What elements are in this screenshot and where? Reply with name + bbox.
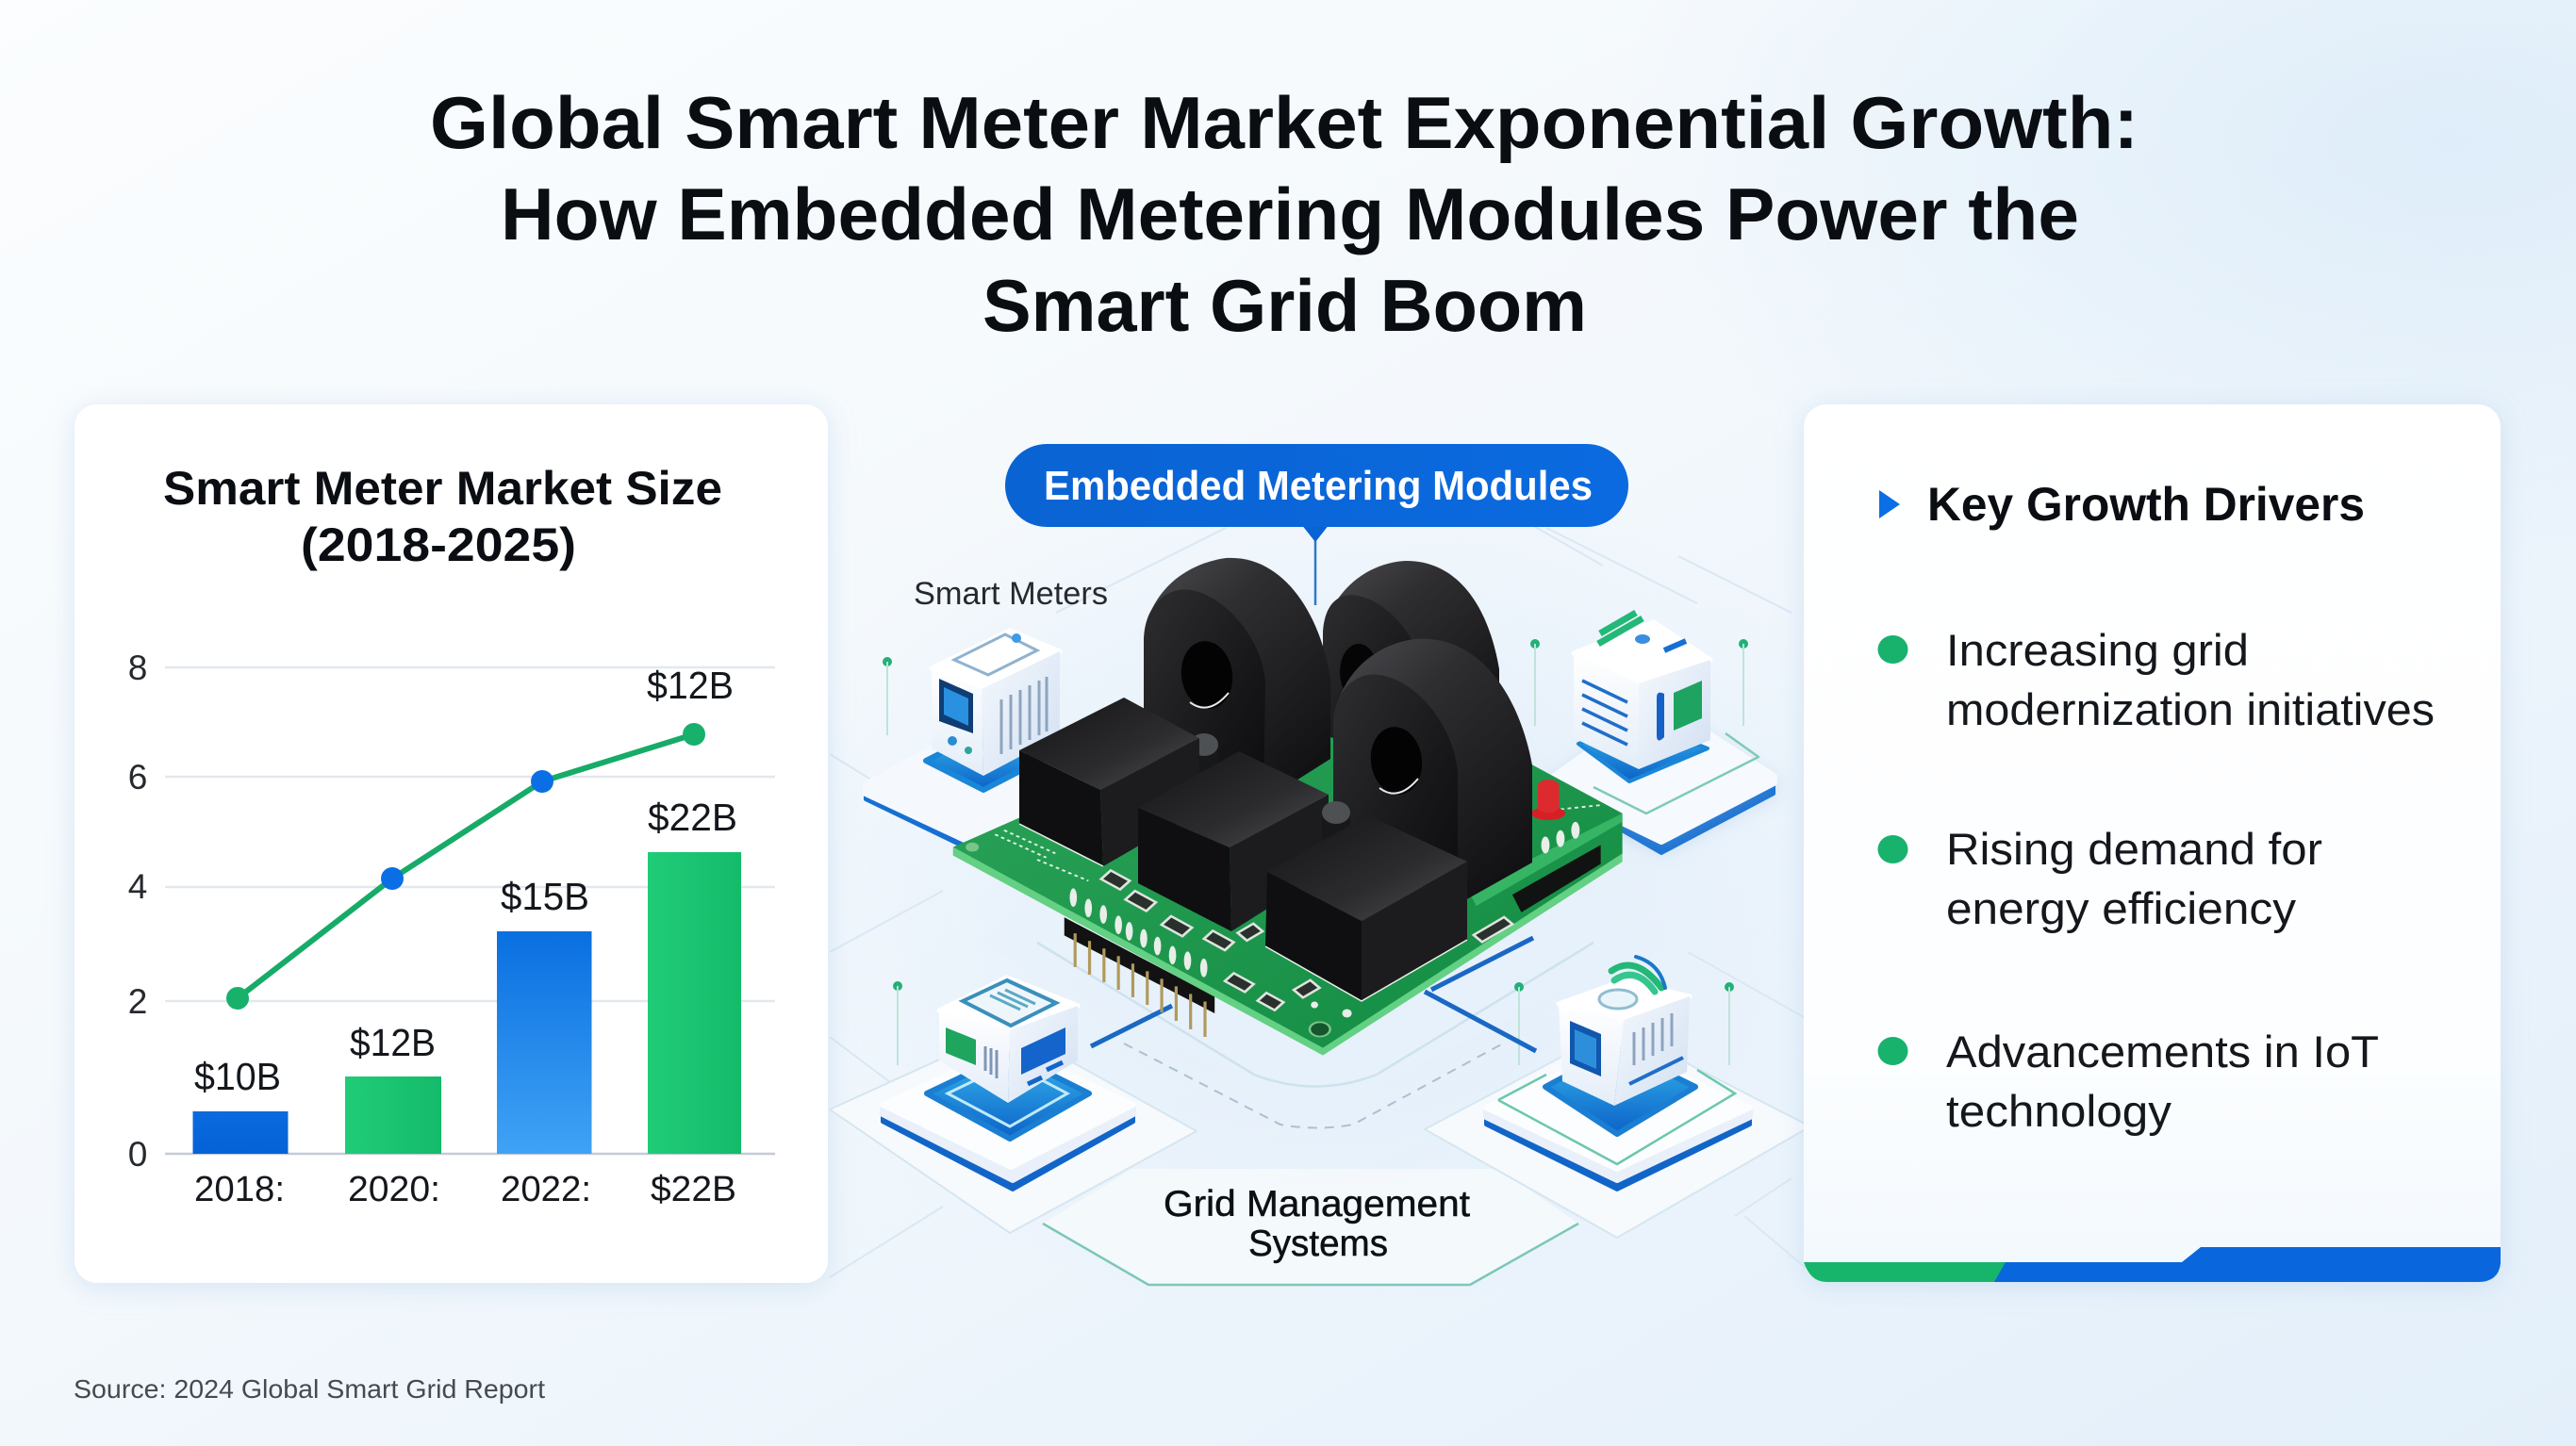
platform bbox=[1617, 777, 1774, 853]
board edge bbox=[953, 847, 1623, 1056]
bars bbox=[192, 852, 741, 1154]
relay cube: front bbox=[1265, 815, 1467, 1001]
chart heading: (2018-2025) bbox=[301, 518, 576, 571]
upper daughter board bbox=[1468, 813, 1623, 906]
mounting holes bbox=[966, 843, 979, 852]
module: smart meter top left bbox=[866, 631, 1060, 850]
capacitor: front bbox=[1322, 801, 1350, 841]
bottom accent band bbox=[1804, 1247, 2501, 1282]
title: Smart Grid Boom bbox=[983, 264, 1587, 347]
transformer: back left bbox=[1144, 558, 1330, 801]
driver: iot technology: technology bbox=[1946, 1086, 2172, 1136]
hexagon platform: grid management bbox=[1043, 1169, 1578, 1285]
small chips bbox=[1101, 870, 1512, 1011]
header pins under board bbox=[1065, 917, 1214, 1037]
source note: Source: 2024 Global Smart Grid Report bbox=[74, 1374, 545, 1404]
title: How Embedded Metering Modules Power the bbox=[501, 173, 2079, 255]
meter body bbox=[1559, 980, 1690, 1020]
x axis labels: 2018: bbox=[194, 1170, 285, 1209]
capacitor: rear bbox=[1190, 733, 1218, 775]
title: Global Smart Meter Market Exponential Growth: bbox=[430, 81, 2138, 164]
y axis labels: 4 bbox=[128, 867, 147, 906]
driver: energy efficiency bbox=[1878, 824, 2322, 933]
right rear header bbox=[1512, 845, 1601, 912]
y axis labels: 0 bbox=[128, 1135, 147, 1174]
label: grid management systems bbox=[1164, 1184, 1470, 1264]
silkscreen text marks bbox=[995, 805, 1603, 880]
y axis labels bbox=[128, 649, 147, 1174]
driver: iot technology: Advancements in IoT bbox=[1946, 1027, 2379, 1076]
platform bbox=[883, 1109, 1133, 1190]
trend line bbox=[226, 723, 705, 1010]
icon: wifi arcs bbox=[1611, 957, 1665, 992]
chart heading bbox=[163, 462, 722, 571]
y axis labels: 6 bbox=[128, 758, 147, 797]
label: grid management systems: Grid Management bbox=[1164, 1184, 1470, 1224]
title bbox=[430, 81, 2138, 347]
transformer: back right bbox=[1323, 561, 1499, 764]
meter body bbox=[1574, 622, 1710, 683]
driver: energy efficiency: energy efficiency bbox=[1946, 883, 2297, 933]
value labels: $12B bbox=[647, 664, 734, 707]
driver: grid modernization: Increasing grid bbox=[1946, 625, 2249, 675]
relay cube: left bbox=[1019, 698, 1199, 866]
value labels: $22B bbox=[648, 796, 737, 839]
red led bbox=[1531, 807, 1565, 820]
chart heading: Smart Meter Market Size bbox=[163, 462, 722, 515]
driver: energy efficiency: Rising demand for bbox=[1946, 824, 2322, 874]
solder points bbox=[1069, 822, 1579, 1017]
board surface bbox=[953, 669, 1623, 1048]
platform bbox=[1486, 1112, 1750, 1190]
meter body bbox=[932, 631, 1060, 689]
module: smart meter top right bbox=[1530, 613, 1774, 853]
x axis labels: $22B bbox=[651, 1170, 736, 1209]
x axis labels: 2022: bbox=[501, 1170, 591, 1209]
icon: triangle marker bbox=[1879, 490, 1900, 518]
driver heading: Key Growth Drivers bbox=[1927, 478, 2365, 531]
module: smart meter bottom right bbox=[1425, 957, 1810, 1238]
panel: market size chart bbox=[74, 404, 828, 1283]
meter body bbox=[939, 978, 1078, 1030]
x axis labels bbox=[194, 1170, 736, 1209]
relay cube: centre bbox=[1138, 751, 1329, 931]
y axis labels: 8 bbox=[128, 649, 147, 687]
circuit board module bbox=[953, 669, 1623, 1056]
module: smart meter bottom left bbox=[830, 978, 1197, 1233]
label: smart meters: Smart Meters bbox=[914, 576, 1108, 612]
y axis labels: 2 bbox=[128, 982, 147, 1021]
chart gridlines and axis bbox=[165, 667, 775, 1154]
value labels: $15B bbox=[501, 875, 589, 918]
central faint platform and dashed link bbox=[981, 896, 1616, 1127]
x axis labels: 2020: bbox=[348, 1170, 440, 1209]
driver: grid modernization: modernization initiatives bbox=[1946, 684, 2435, 734]
value labels bbox=[194, 664, 737, 1098]
connectors bbox=[1091, 938, 1536, 1051]
callout: embedded metering modules: Embedded Metering Modules bbox=[1044, 463, 1593, 509]
panel: key growth drivers bbox=[1804, 404, 2501, 1282]
callout: embedded metering modules bbox=[1005, 444, 1628, 605]
label: grid management systems: Systems bbox=[1248, 1224, 1388, 1264]
value labels: $12B bbox=[350, 1021, 436, 1064]
transformer: front right bbox=[1333, 639, 1532, 905]
driver: grid modernization bbox=[1878, 625, 2435, 734]
board drawn in zoom coordinates bbox=[953, 669, 1623, 1056]
value labels: $10B bbox=[194, 1055, 281, 1098]
driver: iot technology bbox=[1878, 1027, 2379, 1136]
platform bbox=[866, 788, 990, 850]
